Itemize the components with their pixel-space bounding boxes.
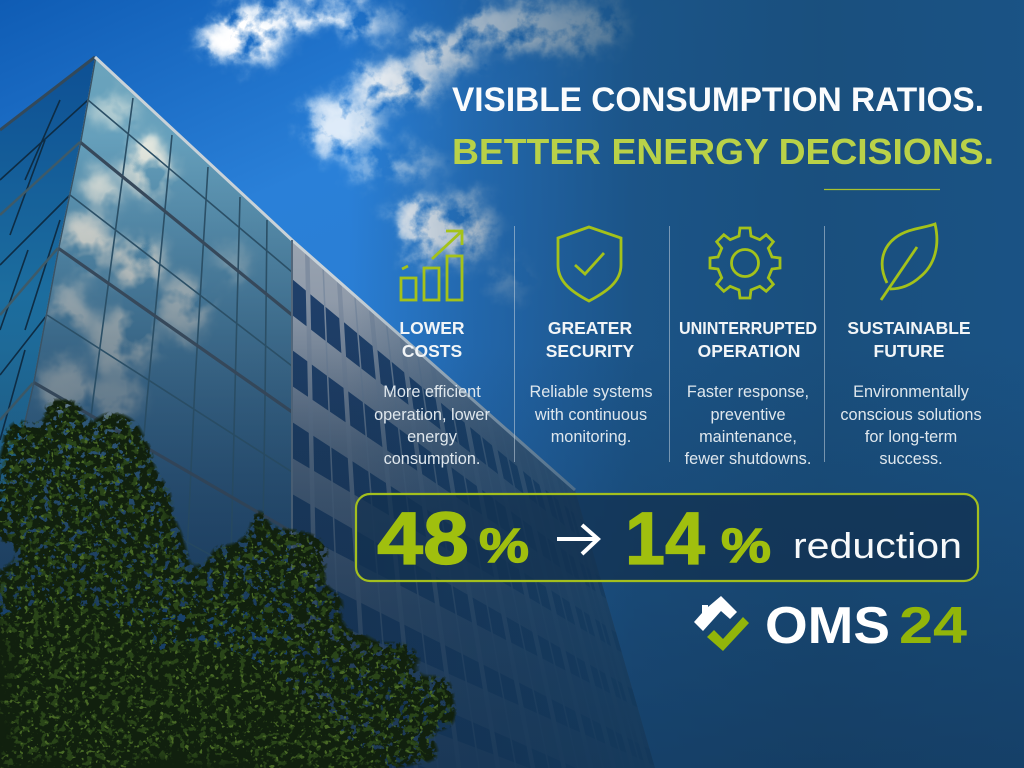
panel: uninterrupted operation: Faster response,: [687, 383, 809, 401]
callout: reduction: [356, 494, 978, 581]
trees: [0, 414, 445, 768]
icon: shield: [558, 227, 621, 301]
panel: greater security: SECURITY: [546, 341, 635, 361]
panel: uninterrupted operation: fewer shutdowns.: [685, 450, 811, 468]
callout: reduction: %: [479, 520, 529, 573]
panel: lower costs: energy: [407, 428, 458, 446]
glass facade left: [0, 60, 94, 511]
callout: reduction: %: [721, 520, 771, 573]
clouds: [203, 0, 629, 292]
panel: sustainable future: conscious solutions: [840, 406, 982, 424]
panel: greater security: GREATER: [548, 318, 632, 338]
panel: lower costs: [374, 231, 490, 468]
panel: lower costs: More efficient: [383, 383, 481, 401]
panel: sustainable future: SUSTAINABLE: [847, 318, 971, 338]
title: BETTER ENERGY DECISIONS.: [452, 131, 994, 172]
icon: gear: [710, 228, 780, 298]
icon: logo mark: [694, 596, 749, 651]
concrete wing with windows: [293, 243, 655, 768]
panel: greater security: [529, 227, 653, 446]
logo: OMS24: 24: [899, 597, 967, 655]
panel: lower costs: operation, lower: [374, 406, 490, 424]
logo: OMS24: OMS: [765, 597, 890, 655]
callout: reduction: 48: [377, 497, 469, 580]
panel: sustainable future: for long-term: [865, 428, 957, 446]
logo: OMS24: [694, 596, 967, 655]
panel: sustainable future: success.: [879, 450, 943, 468]
callout: reduction: 14: [625, 497, 705, 580]
panel: uninterrupted operation: [679, 228, 817, 468]
panel: lower costs: consumption.: [384, 450, 480, 468]
panel: sustainable future: Environmentally: [853, 383, 970, 401]
roof edge: [0, 57, 95, 130]
title: [452, 81, 994, 172]
panel: lower costs: LOWER: [399, 318, 465, 338]
panel: sustainable future: [840, 224, 982, 468]
icon: leaf: [881, 224, 937, 300]
panel: uninterrupted operation: UNINTERRUPTED: [679, 318, 817, 338]
panel: sustainable future: FUTURE: [874, 341, 944, 361]
glass facade main: [0, 59, 291, 682]
panel: uninterrupted operation: preventive: [710, 406, 786, 424]
title: VISIBLE CONSUMPTION RATIOS.: [452, 81, 984, 119]
panel: greater security: Reliable systems: [529, 383, 653, 401]
arrow: [557, 525, 598, 554]
panel: lower costs: COSTS: [402, 341, 462, 361]
panel: greater security: monitoring.: [551, 428, 631, 446]
panel: uninterrupted operation: maintenance,: [699, 428, 797, 446]
panel: greater security: with continuous: [534, 406, 647, 424]
icon: rising bars: [401, 231, 462, 300]
panel: uninterrupted operation: OPERATION: [698, 341, 800, 361]
callout: reduction: reduction: [793, 525, 962, 566]
building: office block: [0, 0, 662, 768]
